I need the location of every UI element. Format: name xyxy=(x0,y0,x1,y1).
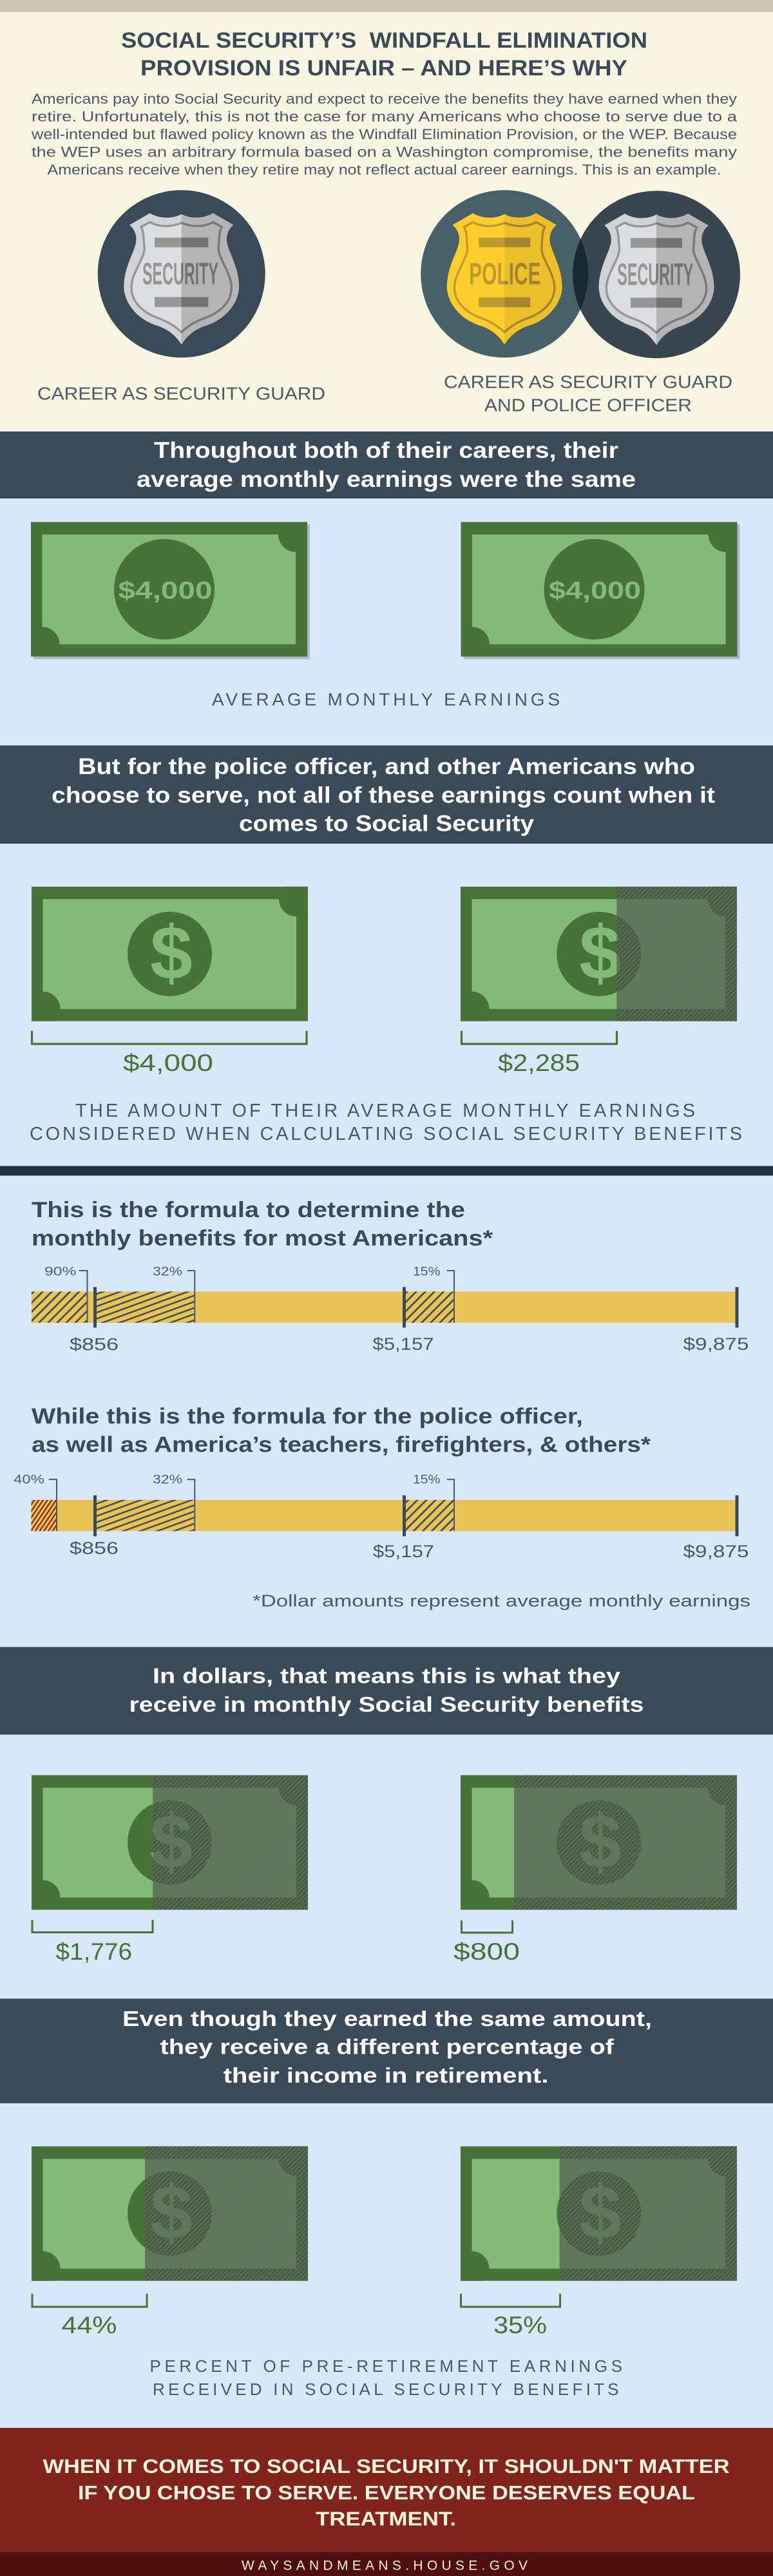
bill: 44 percent: $ xyxy=(150,2170,193,2255)
bar chart: WEP formula xyxy=(14,1472,749,1561)
heading: as well as America’s teachers, firefighters, & others* xyxy=(32,1432,651,1457)
icon: security guard badge: SECURITY xyxy=(142,258,218,292)
caption: earnings considered: CONSIDERED WHEN CALCULATING SOCIAL SECURITY BENEFITS xyxy=(30,1124,742,1144)
footnote: *Dollar amounts represent average monthly earnings xyxy=(253,1591,750,1610)
bar chart: WEP formula: 40% xyxy=(14,1472,44,1486)
caption: earnings considered xyxy=(30,1101,742,1144)
bill: police officer $4,000 xyxy=(455,517,743,662)
icon: police and security badges xyxy=(421,190,740,358)
bill: $1,776 benefit xyxy=(26,1770,314,1915)
intro paragraph: Americans receive when they retire may not reflect actual career earnings. This is an example. xyxy=(48,162,721,178)
heading: This is the formula to determine the xyxy=(32,1198,465,1222)
bill: 35 percent: $ xyxy=(579,2170,622,2255)
intro paragraph: retire. Unfortunately, this is not the case for many Americans who choose to serve due to a xyxy=(32,108,738,125)
banner: different percentage of income xyxy=(0,1999,773,2103)
value: 44 percent: 44% xyxy=(62,2312,117,2338)
icon: security guard badge xyxy=(98,190,265,357)
footer: website xyxy=(0,2552,773,2576)
title: PROVISION IS UNFAIR – AND HERE’S WHY xyxy=(140,56,627,80)
banner: not all earnings count: But for the police officer, and other Americans who xyxy=(78,754,695,779)
banner: not all earnings count: choose to serve, not all of these earnings count when it xyxy=(52,783,715,808)
banner: different percentage of income: Even though they earned the same amount, xyxy=(122,2007,652,2031)
banner: different percentage of income: they receive a different percentage of xyxy=(160,2035,615,2058)
bar chart: WEP formula: 15% xyxy=(413,1472,441,1486)
bill: $800 benefit: $ xyxy=(579,1799,622,1884)
closing call to action xyxy=(0,2428,773,2552)
bracket: 44 percent xyxy=(32,2294,147,2307)
heading: monthly benefits for most Americans* xyxy=(32,1226,493,1251)
intro paragraph: the WEP uses an arbitrary formula based on a Washington compromise, the benefits many xyxy=(32,144,738,160)
bill: full $4,000 considered: $ xyxy=(150,911,193,996)
icon: police and security badges: POLICE xyxy=(469,258,540,292)
bar chart: WEP formula: 32% xyxy=(153,1472,182,1486)
bill: $1,776 benefit: $ xyxy=(150,1799,193,1884)
closing call to action: WHEN IT COMES TO SOCIAL SECURITY, IT SHOULDN'T MATTER xyxy=(43,2455,729,2477)
bar chart: WEP formula: $9,875 xyxy=(683,1542,749,1561)
bar chart: WEP formula: $5,157 xyxy=(373,1542,434,1561)
caption: percent of pre-retirement earnings xyxy=(149,2356,622,2399)
banner: same average monthly earnings xyxy=(0,431,773,498)
value: $2,285: $2,285 xyxy=(498,1050,580,1076)
title: SOCIAL SECURITY’S WINDFALL ELIMINATION xyxy=(121,28,647,53)
bill: 35 percent xyxy=(455,2141,743,2286)
caption: percent of pre-retirement earnings: PERCENT OF PRE-RETIREMENT EARNINGS xyxy=(149,2356,622,2376)
icon: police and security badges: SECURITY xyxy=(617,258,693,292)
bill: $800 benefit xyxy=(455,1770,743,1915)
bar chart: standard formula: $5,157 xyxy=(372,1334,434,1354)
intro paragraph: Americans pay into Social Security and expect to receive the benefits they have earned when they xyxy=(32,91,738,107)
intro paragraph xyxy=(31,91,738,178)
bar chart: standard formula: $9,875 xyxy=(683,1334,749,1354)
caption: average monthly earnings: AVERAGE MONTHLY EARNINGS xyxy=(212,689,560,710)
banner: same average monthly earnings: average monthly earnings were the same xyxy=(137,467,636,492)
panel: earnings considered xyxy=(26,882,743,1144)
title xyxy=(121,28,647,80)
bracket: $1,776 xyxy=(32,1920,153,1932)
banner: not all earnings count xyxy=(0,746,773,844)
bill: police officer $4,000: $4,000 xyxy=(549,577,641,604)
banner: monthly benefits in dollars xyxy=(0,1647,773,1735)
caption: percent of pre-retirement earnings: RECEIVED IN SOCIAL SECURITY BENEFITS xyxy=(153,2380,619,2399)
value: $800: $800 xyxy=(453,1938,520,1965)
label: career as security guard: CAREER AS SECURITY GUARD xyxy=(37,384,325,403)
intro paragraph: well-intended but flawed policy known as the Windfall Elimination Provision, or the WEP. Because xyxy=(31,126,737,142)
bill: full $4,000 considered xyxy=(26,882,314,1027)
bracket: $2,285 xyxy=(461,1031,617,1044)
bar chart: standard formula: $856 xyxy=(70,1334,119,1354)
bill: partial $2,285 considered: $ xyxy=(579,911,622,996)
panel: formula for police officer xyxy=(14,1404,750,1610)
panel: average monthly earnings bills xyxy=(24,517,743,710)
bill: 44 percent xyxy=(26,2141,314,2286)
bracket: 35 percent xyxy=(461,2294,560,2307)
bill: security guard $4,000 xyxy=(24,517,313,662)
bill: partial $2,285 considered xyxy=(455,882,743,1027)
footer: website: WAYSANDMEANS.HOUSE.GOV xyxy=(242,2558,528,2573)
bar chart: standard formula: 15% xyxy=(413,1265,441,1279)
caption: earnings considered: THE AMOUNT OF THEIR AVERAGE MONTHLY EARNINGS xyxy=(75,1101,695,1121)
bar chart: standard formula: 32% xyxy=(153,1265,182,1279)
divider bar xyxy=(0,1166,773,1176)
bracket: $800 xyxy=(461,1920,513,1933)
value: 35 percent: 35% xyxy=(493,2312,547,2338)
value: $4,000: $4,000 xyxy=(123,1050,213,1076)
banner: different percentage of income: their income in retirement. xyxy=(223,2063,549,2087)
bar chart: standard formula xyxy=(32,1265,749,1354)
bill: security guard $4,000: $4,000 xyxy=(119,577,213,604)
label: career as security guard and police officer xyxy=(444,372,732,415)
closing call to action: TREATMENT. xyxy=(316,2508,456,2530)
heading: While this is the formula for the police officer, xyxy=(32,1404,583,1428)
label: career as security guard and police officer: CAREER AS SECURITY GUARD xyxy=(444,372,732,392)
value: $1,776: $1,776 xyxy=(55,1938,132,1965)
banner: monthly benefits in dollars: In dollars, that means this is what they xyxy=(153,1664,621,1687)
panel: benefits in dollars xyxy=(26,1770,743,1965)
panel: formula for most Americans xyxy=(32,1198,749,1354)
banner: not all earnings count: comes to Social Security xyxy=(239,811,535,836)
bar chart: standard formula: 90% xyxy=(44,1265,76,1279)
bracket: $4,000 xyxy=(32,1031,307,1044)
banner: monthly benefits in dollars: receive in monthly Social Security benefits xyxy=(129,1692,644,1716)
label: career as security guard and police officer: AND POLICE OFFICER xyxy=(484,395,692,415)
bar chart: WEP formula: $856 xyxy=(70,1539,119,1558)
heading xyxy=(32,1198,493,1251)
panel: introduction xyxy=(0,0,773,431)
banner: same average monthly earnings: Throughout both of their careers, their xyxy=(154,438,618,463)
closing call to action: IF YOU CHOSE TO SERVE. EVERYONE DESERVES EQUAL xyxy=(78,2481,695,2504)
heading xyxy=(32,1404,651,1457)
panel: percentage of earnings xyxy=(26,2141,743,2399)
